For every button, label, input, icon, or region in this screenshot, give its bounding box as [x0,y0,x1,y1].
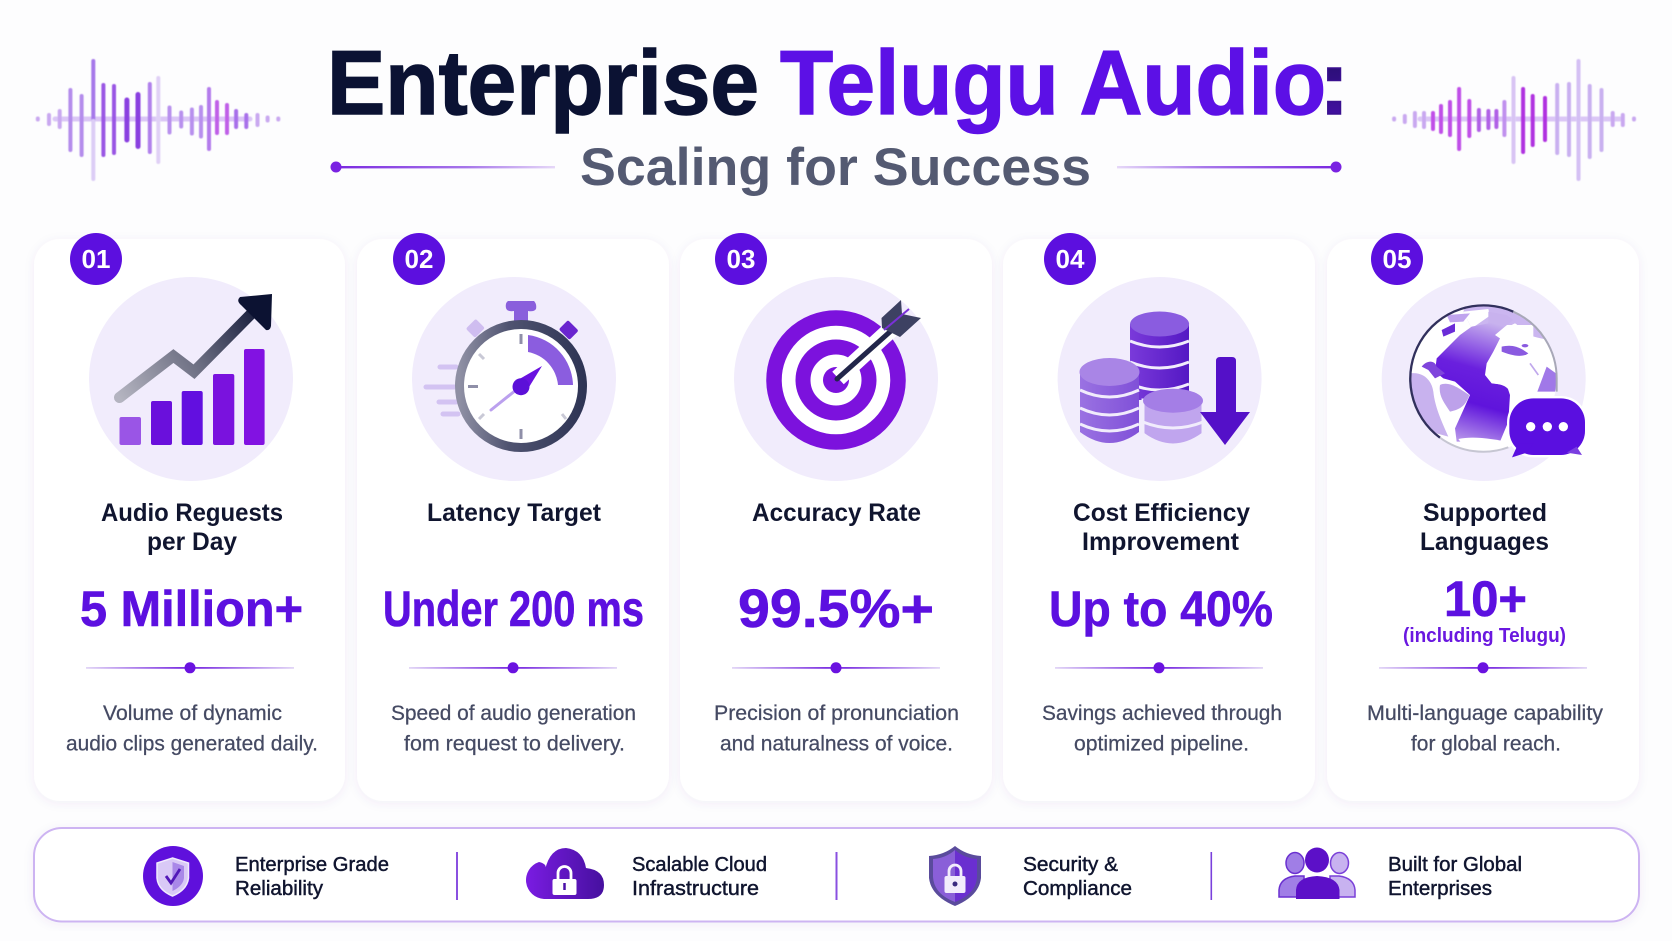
metric value: (including Telugu) [1403,625,1566,647]
metric heading [1073,499,1250,556]
description: Volume of dynamic [103,702,282,725]
description: optimized pipeline. [1074,732,1249,756]
description [66,702,318,756]
number badge 02: 02 [405,244,433,274]
card background [680,239,992,801]
panel: card 2 latency [357,233,669,801]
title: Telugu Audio [780,33,1326,134]
description [391,702,636,756]
icon: shield badge [143,846,203,906]
number badge 03: 03 [727,244,755,274]
description: Precision of pronunciation [714,702,959,725]
title: Enterprise [327,33,759,134]
subtitle rule left [330,162,555,172]
icon: target with arrow [734,277,938,481]
card background [34,239,345,801]
divider [1379,662,1587,673]
metric heading: Latency Target [427,499,602,527]
metric heading: Cost Efficiency [1073,499,1250,527]
metric heading: Audio Reguests [101,499,283,527]
icon: rising bar chart [89,277,293,481]
feature text: reliability: Reliability [235,877,324,900]
feature text: reliability [235,853,389,900]
metric heading [1420,499,1549,556]
feature text: security [1023,853,1132,900]
description: Speed of audio generation [391,702,636,725]
card background [357,239,669,801]
divider [1055,662,1263,673]
icon: cloud with lock [526,848,604,899]
divider [86,662,294,673]
waveform right [1394,61,1634,179]
card background [1003,239,1315,801]
subtitle: Scaling for Success [580,138,1091,197]
number badge 03 [715,233,767,285]
feature text: security: Compliance [1023,877,1132,900]
description [1042,702,1282,756]
metric value: 5 Million+ [80,581,303,637]
panel: card 4 cost [1003,233,1315,801]
feature text: reliability: Enterprise Grade [235,853,389,876]
metric heading [101,499,283,556]
panel: card 3 accuracy [680,233,992,801]
description [714,702,959,756]
metric value: Under 200 ms [383,581,644,637]
icon: globe with chat bubble [1382,277,1586,481]
description: fom request to delivery. [404,732,625,756]
feature text: enterprises: Built for Global [1388,853,1522,876]
panel: bottom feature bar [34,828,1639,922]
number badge 04: 04 [1056,244,1085,274]
number badge 04 [1044,233,1096,285]
metric heading: Accuracy Rate [752,499,921,527]
feature text: enterprises: Enterprises [1388,877,1492,900]
description: and naturalness of voice. [720,732,953,756]
description: Savings achieved through [1042,702,1282,725]
icon: security shield [929,846,981,906]
metric heading: Improvement [1082,528,1240,556]
number badge 01 [70,233,122,285]
feature text: cloud [632,853,767,900]
description: for global reach. [1411,732,1561,756]
divider [409,662,617,673]
feature text: enterprises [1388,853,1522,900]
metric heading: Supported [1423,499,1547,527]
metric heading: per Day [147,528,237,556]
metric value: Up to 40% [1049,581,1273,637]
title [327,33,1349,134]
divider [732,662,940,673]
number badge 01: 01 [82,244,110,274]
description: audio clips generated daily. [66,732,318,756]
number badge 02 [393,233,445,285]
icon: coin stacks with down arrow [1058,277,1262,481]
waveform left [38,61,278,179]
icon: stopwatch [412,277,616,481]
feature text: cloud: Infrastructure [632,877,759,900]
number badge 05: 05 [1383,244,1411,274]
bar background [34,828,1639,922]
icon: people group [1279,848,1355,899]
metric value: 99.5%+ [738,579,934,639]
metric heading: Languages [1420,528,1549,556]
panel: card 5 languages [1327,233,1639,801]
subtitle rule right [1117,162,1342,172]
card background [1327,239,1639,801]
feature text: cloud: Scalable Cloud [632,853,767,876]
description: Multi-language capability [1367,702,1604,725]
metric value: 10+ [1444,571,1527,627]
feature text: security: Security & [1023,853,1118,876]
title: : [1319,33,1349,134]
number badge 05 [1371,233,1423,285]
panel: card 1 audio requests [34,233,345,801]
description [1367,702,1604,756]
metric value [1403,571,1566,647]
